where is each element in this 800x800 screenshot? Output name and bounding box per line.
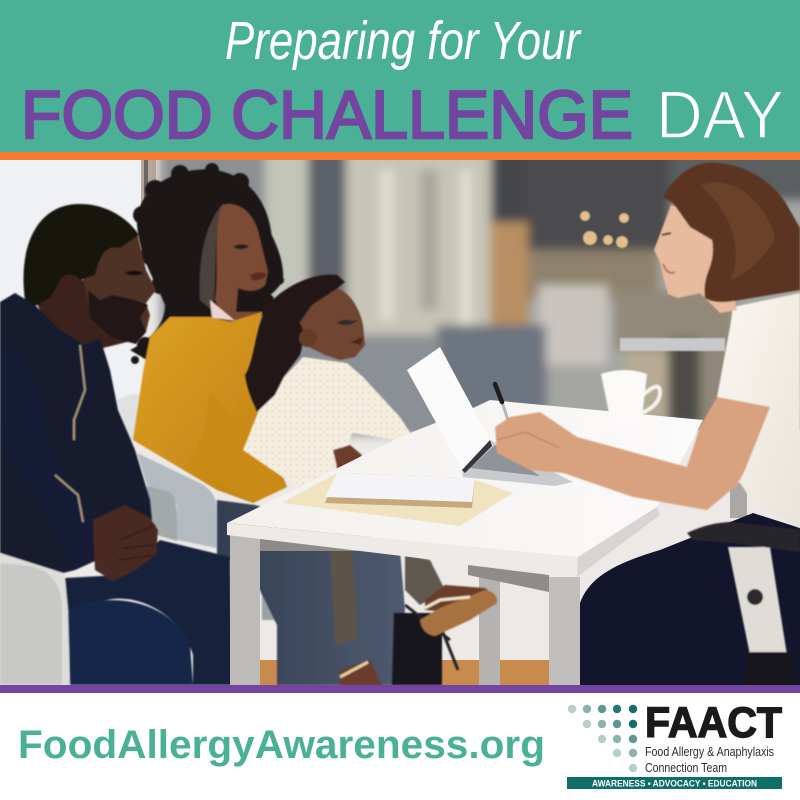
consultant's chair back	[730, 483, 747, 518]
chair: woman's armchair	[117, 394, 284, 620]
bottom-left chair	[0, 553, 112, 685]
title: Food Challenge Day: FOOD CHALLENGE	[21, 77, 633, 153]
title: Food Challenge Day: DAY	[656, 77, 784, 153]
folder	[282, 473, 513, 526]
neck and face	[654, 205, 737, 313]
child's lower leg and sandal	[340, 555, 497, 685]
floor	[255, 660, 555, 685]
child's sweater	[243, 357, 413, 487]
child's hair and braids	[245, 275, 345, 412]
arm and hands	[495, 397, 770, 510]
table	[227, 400, 703, 685]
t-shirt	[717, 293, 800, 528]
FAACT logo	[567, 699, 782, 789]
beard	[88, 290, 148, 344]
trousers	[65, 540, 232, 685]
logo tagline bar	[567, 777, 782, 789]
notebook	[325, 473, 475, 508]
table top	[227, 400, 703, 557]
pen	[495, 384, 508, 420]
child's face	[300, 287, 365, 360]
table legs	[230, 535, 260, 685]
ear	[58, 270, 78, 296]
table edge	[227, 507, 660, 577]
office chair	[687, 522, 800, 685]
curls around the hair	[131, 163, 284, 364]
logo tagline bar: AWARENESS • ADVOCACY • EDUCATION	[592, 778, 757, 788]
purple divider	[0, 685, 800, 693]
zipper	[55, 345, 85, 522]
jeans	[217, 500, 405, 685]
man	[0, 204, 232, 685]
hair	[663, 163, 800, 302]
hair	[23, 204, 139, 306]
consultant	[495, 163, 800, 528]
website address: FoodAllergyAwareness.org	[18, 723, 545, 767]
curls front	[258, 215, 283, 291]
sweater	[133, 312, 287, 503]
consultant's legs	[580, 513, 800, 685]
logo full name	[645, 745, 774, 775]
title: Preparing for Your: Preparing for Your	[225, 11, 582, 71]
logo wordmark: FAACT	[645, 699, 782, 747]
hands	[93, 505, 158, 581]
child	[243, 275, 413, 487]
child's hand	[333, 445, 362, 472]
photo: family meeting with a consultant	[0, 150, 800, 685]
neck and head	[35, 270, 135, 350]
laptop	[407, 347, 573, 486]
hair back	[130, 169, 282, 365]
window with blurred city view	[160, 150, 800, 435]
logo full name: Connection Team	[645, 761, 727, 775]
back wall	[0, 160, 800, 685]
header band	[0, 0, 800, 160]
logo dots	[568, 705, 637, 772]
jacket	[0, 293, 152, 573]
face	[215, 204, 268, 330]
logo full name: Food Allergy & Anaphylaxis	[645, 745, 774, 759]
coffee cup	[601, 370, 660, 421]
woman	[130, 163, 405, 685]
